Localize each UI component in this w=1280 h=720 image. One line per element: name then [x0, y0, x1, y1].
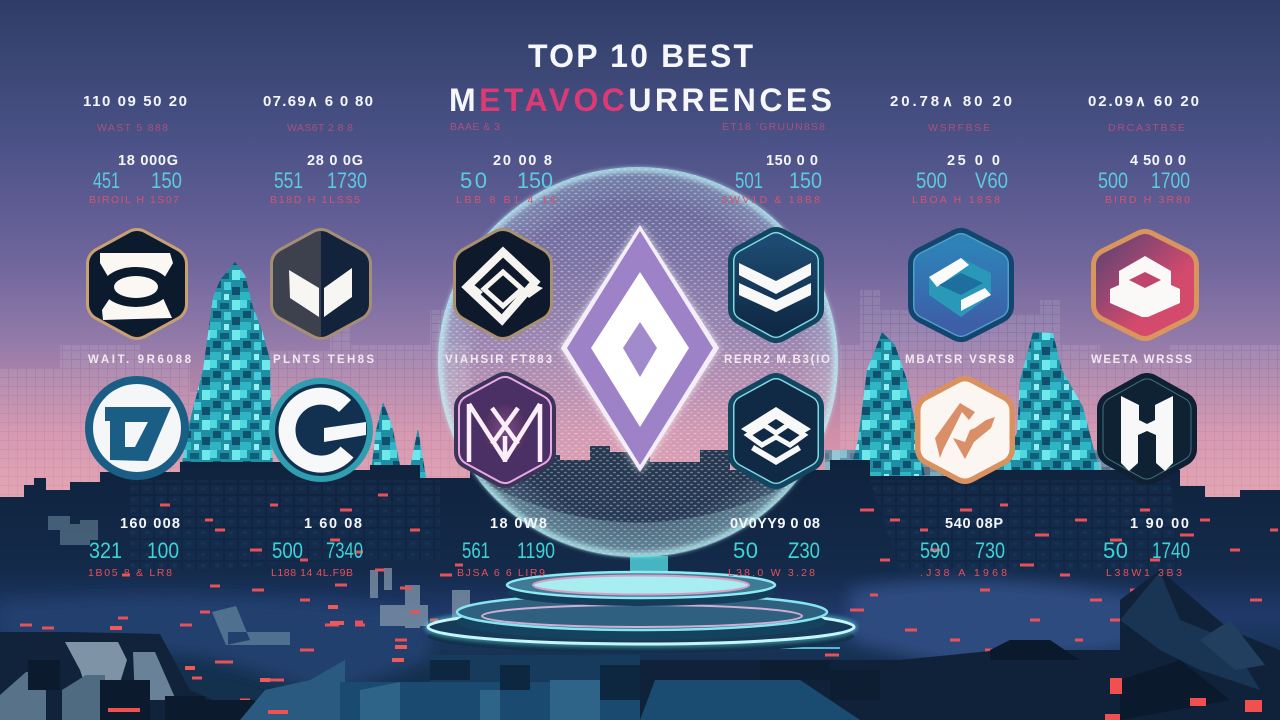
holographic sphere — [438, 167, 838, 558]
column 3 top stats: LBB 8 B1 4 18 — [456, 194, 556, 206]
column 3 bottom stats: BJSA 6 6 LIR9 — [457, 567, 545, 579]
column 4 bottom stats: 50 — [733, 538, 758, 563]
voxel terrain texture — [130, 480, 1180, 570]
column 2 top stats — [263, 93, 373, 206]
column 2 top stats: 551 — [274, 168, 303, 193]
column 5 bottom stats: 540 08P — [945, 516, 1003, 532]
column 6 top stats: 500 — [1098, 168, 1128, 193]
badge 10 — [741, 390, 811, 472]
column 2 bottom stats: 7340 — [326, 538, 363, 563]
column 2 bottom stats: 500 — [272, 538, 303, 563]
column 6 top stats: 1700 — [1151, 168, 1190, 193]
column 4 bottom stats: L38.0 W 3.28 — [728, 567, 815, 579]
column 5 bottom stats: 730 — [975, 538, 1005, 563]
column 6 top stats: BIRD H 3R80 — [1105, 194, 1190, 206]
column 5 top stats: 25 0 0 — [947, 153, 1000, 169]
column 3 bottom stats: 18 0W8 — [490, 516, 547, 532]
column 1 bottom stats: 1B05 8 & LR8 — [88, 567, 172, 579]
column 2 top stats: B18D H 1LSS5 — [270, 194, 360, 206]
column 1 top stats: 110 09 50 20 — [83, 93, 187, 110]
column 6 bottom stats: L38W1 3B3 — [1106, 567, 1182, 579]
foreground blocks left — [0, 632, 640, 720]
column 2 bottom stats — [271, 516, 363, 579]
ground rubble — [48, 516, 470, 645]
column 6 bottom stats: 1740 — [1152, 538, 1190, 563]
badge 3 — [463, 246, 543, 322]
column 1 top stats: BIROIL H 1S07 — [89, 194, 179, 206]
column 1 bottom stats: 321 — [89, 538, 122, 563]
column 1 bottom stats: 160 008 — [120, 516, 180, 532]
coin name labels: WAIT. 9R6088 — [88, 354, 192, 366]
column 1 top stats: WAST 5 888 — [97, 122, 168, 134]
column 1 bottom stats: 100 — [147, 538, 179, 563]
column 5 top stats — [890, 93, 1012, 206]
column 5 top stats: V60 — [975, 168, 1008, 193]
column 5 bottom stats: .J38 A 1968 — [920, 567, 1007, 579]
badge 8 — [926, 246, 996, 324]
mid-ground plains — [0, 580, 1180, 695]
column 1 bottom stats — [88, 516, 180, 579]
column 4 bottom stats — [728, 516, 820, 579]
column 2 top stats: 07.69∧ 6 0 80 — [263, 93, 373, 110]
column 1 top stats: 18 000G — [118, 153, 178, 169]
badge 7 — [739, 244, 811, 326]
column 6 top stats: 4 50 0 0 — [1130, 153, 1186, 169]
column 4 top stats: ET18 'GRUUN8S8 — [722, 121, 825, 133]
column 6 top stats: DRCA3TBSE — [1108, 122, 1185, 134]
badge 6 — [469, 390, 540, 470]
glowing platform — [428, 556, 854, 653]
title: TOP 10 BEST — [528, 38, 753, 74]
coin name labels: WEETA WRSSS — [1091, 354, 1192, 366]
column 4 top stats — [722, 121, 825, 206]
column 5 top stats: WSRFBSE — [928, 122, 990, 134]
coin name labels: RERR2 M.B3(IO — [724, 354, 830, 366]
column 4 top stats: 150 0 0 — [766, 153, 818, 169]
red block highlights — [108, 678, 1262, 720]
column 6 bottom stats: 50 — [1103, 538, 1128, 563]
column 4 bottom stats: Z30 — [788, 538, 820, 563]
column 4 top stats: 6WV1D & 18B8 — [722, 194, 820, 206]
red terrain specks — [20, 495, 1278, 720]
column 1 top stats: 150 — [151, 168, 182, 193]
column 3 bottom stats — [457, 516, 555, 579]
teal pixel towers — [180, 262, 1120, 500]
column 2 top stats: WAS6T 2 8 8 — [287, 122, 353, 134]
badge 12 — [1115, 391, 1179, 471]
badge 2 — [288, 246, 354, 322]
column 2 top stats: 1730 — [327, 168, 367, 193]
column 5 bottom stats — [920, 516, 1007, 579]
column 3 top stats — [450, 121, 556, 206]
column 1 top stats — [83, 93, 187, 206]
title: METAVOCURRENCES — [449, 82, 832, 118]
badge 1 — [100, 246, 173, 322]
foreground blocks right — [640, 570, 1280, 720]
badge 11 — [933, 394, 997, 466]
badge 4 — [85, 376, 189, 480]
central diamond logo — [561, 225, 719, 472]
column 3 bottom stats: 1190 — [517, 538, 555, 563]
column 4 bottom stats: 0V0YY9 0 08 — [730, 516, 820, 532]
column 4 top stats: 150 — [789, 168, 822, 193]
coin name labels: MBATSR VSRS8 — [905, 354, 1015, 366]
column 1 top stats: 451 — [93, 168, 120, 193]
badge 9 — [1109, 247, 1181, 323]
coin name labels — [88, 354, 1192, 366]
column 3 top stats: 150 — [517, 168, 553, 193]
column 6 bottom stats — [1103, 516, 1190, 579]
voxel terrain — [0, 446, 1280, 720]
column 3 bottom stats: 561 — [462, 538, 490, 563]
column 3 top stats: 50 — [460, 168, 487, 193]
column 6 top stats: 02.09∧ 60 20 — [1088, 93, 1199, 110]
badge 5 — [269, 378, 373, 482]
title — [449, 38, 832, 118]
column 2 bottom stats: L188 14 4L.F9B — [271, 567, 353, 579]
column 5 top stats: 500 — [916, 168, 947, 193]
column 5 bottom stats: 590 — [920, 538, 950, 563]
column 5 top stats: LBOA H 18S8 — [912, 194, 1000, 206]
column 4 top stats: 501 — [735, 168, 763, 193]
column 3 top stats: 20 00 8 — [493, 153, 552, 169]
coin name labels: PLNTS TEH8S — [273, 354, 374, 366]
column 2 bottom stats: 1 60 08 — [304, 516, 362, 532]
coin name labels: VIAHSIR FT883 — [445, 354, 552, 366]
column 2 top stats: 28 0 0G — [307, 153, 363, 169]
column 6 bottom stats: 1 90 00 — [1130, 516, 1189, 532]
column 3 top stats: BAAE & 3 — [450, 121, 500, 133]
column 5 top stats: 20.78∧ 80 20 — [890, 93, 1012, 110]
column 6 top stats — [1088, 93, 1199, 206]
pixel grid skyline — [0, 290, 1280, 520]
